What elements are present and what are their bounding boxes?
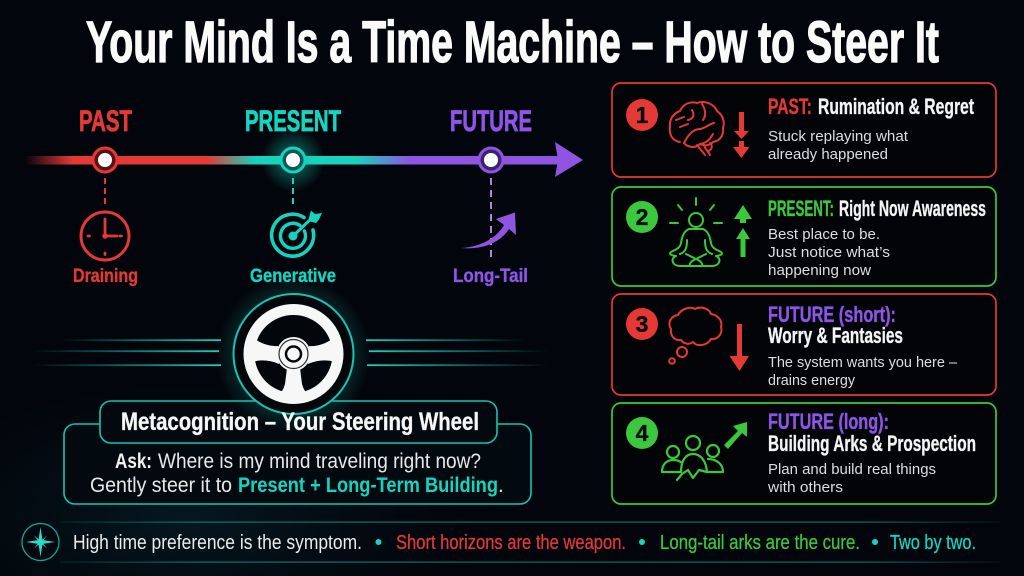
card 3 body: The system wants you here – [768,355,958,371]
icon: compass [22,524,59,560]
card 2: present awareness [612,187,996,286]
icon: up-right arrow [724,422,747,449]
badge 4 [626,417,658,449]
timeline arrow [25,142,583,177]
panel outline [64,424,531,504]
badge 2 [626,201,658,233]
panel line 1: Ask: [115,450,152,473]
card 3 heading: Worry & Fantasies [768,323,903,348]
card 2 heading: PRESENT: [768,196,834,221]
icon: down arrows [733,112,750,158]
card 3: short future [612,294,996,395]
icon: target [272,210,322,256]
card 3 body [768,355,958,389]
card 4: long future [612,403,996,504]
metacognition panel [64,276,531,504]
card 3 body: drains energy [768,373,856,389]
badge 2: 2 [636,204,648,230]
card 2 body: Best place to be. [768,227,880,243]
card 1: past rumination [612,83,996,177]
timeline label: future: FUTURE [450,105,532,138]
badge 3: 3 [636,311,648,337]
card 1 heading: PAST: [768,94,812,119]
panel line 2: Gently steer it to [90,474,232,497]
label: draining: Draining [73,266,138,287]
timeline label: past: PAST [79,105,132,138]
heading box [100,401,497,443]
panel line 2: Present + Long-Term Building [238,474,498,497]
card 4 body: with others [767,480,843,496]
card 4 heading [768,409,976,456]
card 2 body: Just notice what’s [768,245,890,261]
footer message: weapon: Short horizons are the weapon. [396,532,626,554]
footer message: two by two: Two by two. [890,532,976,554]
badge 1: 1 [636,102,649,128]
card 3 heading [768,302,903,348]
node: future [478,146,504,174]
badge 4: 4 [636,420,649,446]
icon: meditating figure [670,198,722,266]
card 1 body [768,129,908,163]
steering wheel icon [216,276,372,432]
icon: long down arrow [730,324,749,371]
icon: long-tail swoosh arrow [461,212,516,248]
panel line 1: Where is my mind traveling right now? [158,450,481,473]
badge 3 [626,308,658,340]
label: long-tail: Long-Tail [453,266,528,287]
card 1 body: Stuck replaying what [768,129,908,145]
card 4 heading: FUTURE (long): [768,409,889,434]
node: present [261,128,325,192]
icon: group of people [662,436,723,480]
timeline label: present: PRESENT [245,105,341,138]
footer message: cure: Long-tail arks are the cure. [660,532,860,554]
card 1 heading [768,94,974,119]
icon: brain [670,102,724,155]
icon: up arrows [734,205,752,257]
card 1 body: already happened [768,147,888,163]
footer strip [22,522,1000,563]
card 4 body: Plan and build real things [768,462,936,478]
steering wheel speed lines [30,339,550,366]
card 2 body: happening now [768,263,872,279]
label: generative: Generative [250,266,336,287]
node: past [92,146,118,174]
icon: thought cloud [669,308,721,364]
heading text: Metacognition – Your Steering Wheel [121,408,479,436]
panel line 2: . [498,474,504,497]
card 3 heading: FUTURE (short): [768,302,896,327]
panel line 2 [90,474,504,497]
icon: clock [81,212,129,260]
timeline [25,105,583,287]
footer message: symptom: High time preference is the symptom. [73,532,362,554]
card 2 heading [768,196,986,221]
card 2 body [768,227,890,279]
card 4 body [767,462,936,496]
badge 1 [626,99,658,131]
